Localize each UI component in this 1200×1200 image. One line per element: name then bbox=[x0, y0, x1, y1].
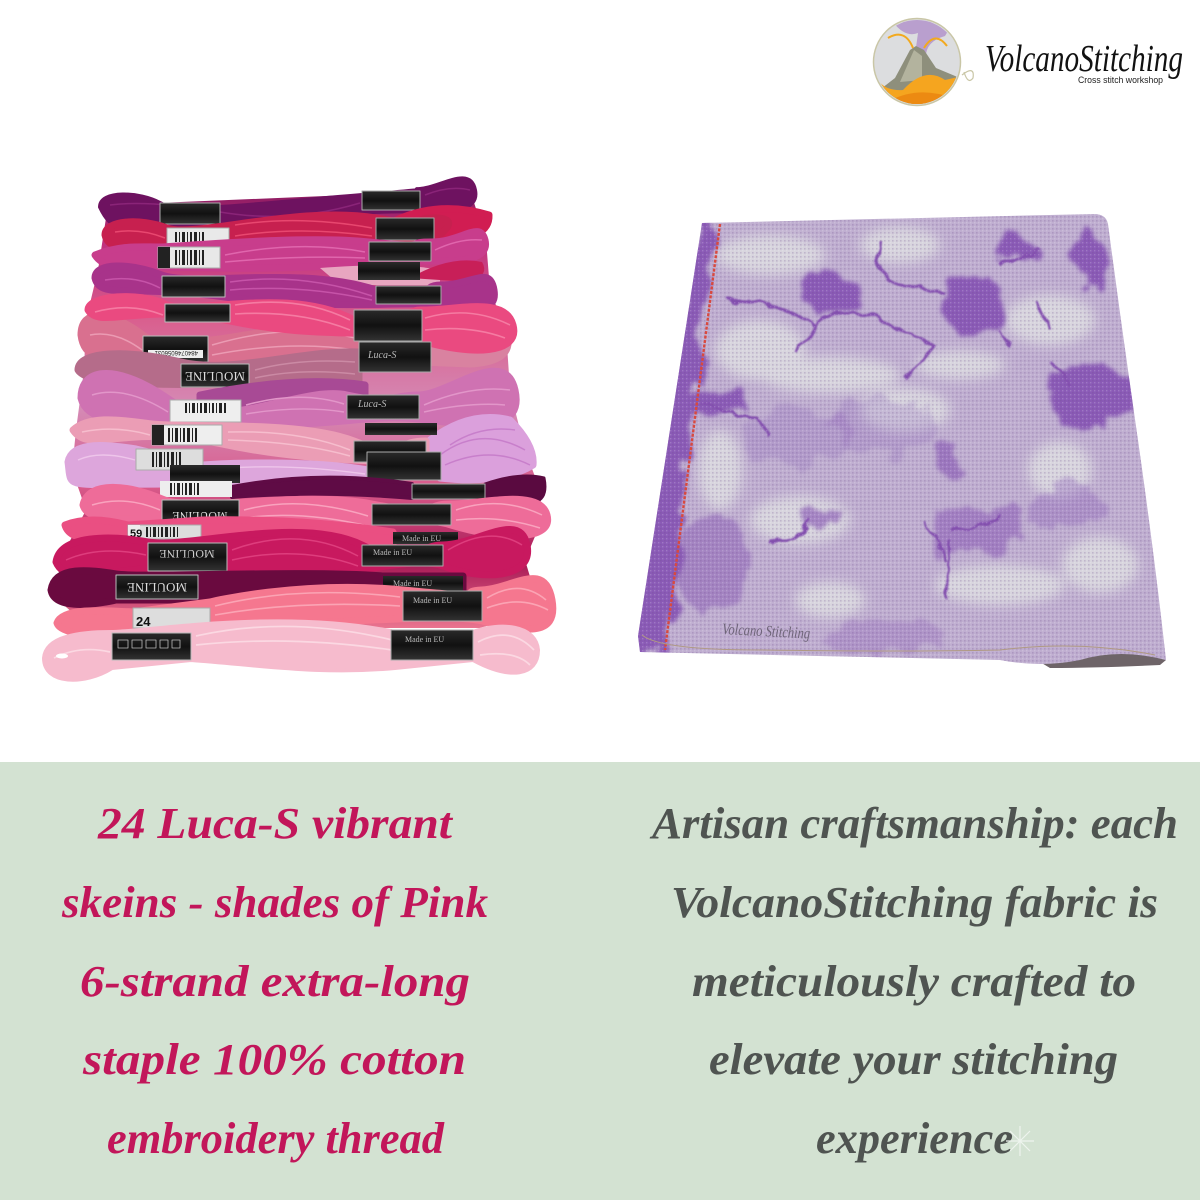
label: Made in EU: Made in EU bbox=[373, 548, 412, 557]
skein: pale pink front bbox=[44, 621, 538, 680]
skein: rose pink bbox=[83, 487, 548, 536]
label: MOULINE: MOULINE bbox=[185, 369, 245, 384]
text block: fabric description: experience bbox=[816, 1114, 1013, 1163]
skein: dark purple bbox=[100, 178, 475, 232]
label: MOULINE: MOULINE bbox=[127, 580, 187, 595]
text block: thread description: staple 100% cotton bbox=[82, 1035, 466, 1084]
fabric red selvedge stitching bbox=[665, 224, 720, 650]
fabric dye veins bbox=[700, 240, 1070, 600]
skein: orchid: Luca-S bbox=[357, 399, 386, 410]
skein: red pink bbox=[105, 209, 489, 249]
text block: fabric description: meticulously crafted to bbox=[692, 957, 1136, 1006]
text block: thread description bbox=[61, 799, 488, 1163]
text block: thread description: embroidery thread bbox=[107, 1114, 445, 1163]
label: barcode number: 4840746056031 bbox=[154, 349, 198, 355]
photo: stack of pink embroidery thread skeins bbox=[44, 178, 553, 680]
skein: lilac bbox=[68, 446, 441, 485]
skein: hot pink lower bbox=[65, 520, 458, 548]
icon: small sparkle bbox=[1006, 1126, 1034, 1156]
photo: hand-dyed purple aida fabric bbox=[622, 205, 1175, 675]
skein: dusty pink bbox=[81, 315, 508, 365]
label: Made in EU: Made in EU bbox=[413, 596, 452, 605]
skein: dusty mauve bbox=[78, 342, 431, 388]
skein: pale pink bbox=[73, 420, 426, 462]
label: Made in EU: Made in EU bbox=[405, 635, 444, 644]
skein: hot pink bbox=[88, 297, 514, 350]
text block: thread description: 6-strand extra-long bbox=[80, 957, 470, 1006]
icon: volcano emblem bbox=[872, 15, 973, 110]
skein: pale pink and red behind bbox=[320, 260, 484, 285]
fabric pale patches bbox=[698, 227, 1138, 618]
skein: purple bbox=[95, 266, 494, 307]
label: number 59: 59 bbox=[130, 528, 142, 540]
skein: dark maroon bbox=[51, 571, 463, 604]
skein: magenta bbox=[95, 232, 486, 268]
text block: thread description: 24 Luca-S vibrant bbox=[97, 799, 454, 848]
fabric signature: Volcano Stitching bbox=[722, 621, 811, 643]
panel: green caption band bbox=[0, 762, 1200, 1200]
skein: deep plum bbox=[160, 476, 545, 502]
label: MOULINE: MOULINE bbox=[159, 547, 215, 561]
skein: lilac tail bbox=[365, 418, 533, 480]
logo tagline: Cross stitch workshop bbox=[1078, 75, 1163, 86]
logo: VolcanoStitching bbox=[872, 15, 1183, 110]
text block: fabric description: elevate your stitching bbox=[709, 1035, 1118, 1084]
label: Made in EU: Made in EU bbox=[402, 534, 441, 543]
fabric hem stitching bbox=[642, 635, 1155, 655]
skein: crimson bbox=[56, 529, 528, 577]
label: Made in EU: Made in EU bbox=[393, 579, 432, 588]
skein: salmon pink bbox=[57, 579, 553, 635]
fabric purple dye patches bbox=[622, 209, 1128, 654]
skein: dusty mauve: Luca-S bbox=[367, 350, 396, 361]
label: number 24: 24 bbox=[136, 614, 151, 629]
text block: thread description: skeins - shades of Pink bbox=[61, 878, 488, 927]
skein stack backdrop bbox=[58, 190, 542, 628]
skein: orchid bbox=[81, 371, 516, 424]
text block: fabric description: VolcanoStitching fabric is bbox=[671, 878, 1158, 927]
text block: fabric description bbox=[649, 799, 1178, 1163]
text block: fabric description: Artisan craftsmanship: each bbox=[649, 799, 1178, 848]
label: MOULINE: MOULINE bbox=[172, 509, 228, 523]
